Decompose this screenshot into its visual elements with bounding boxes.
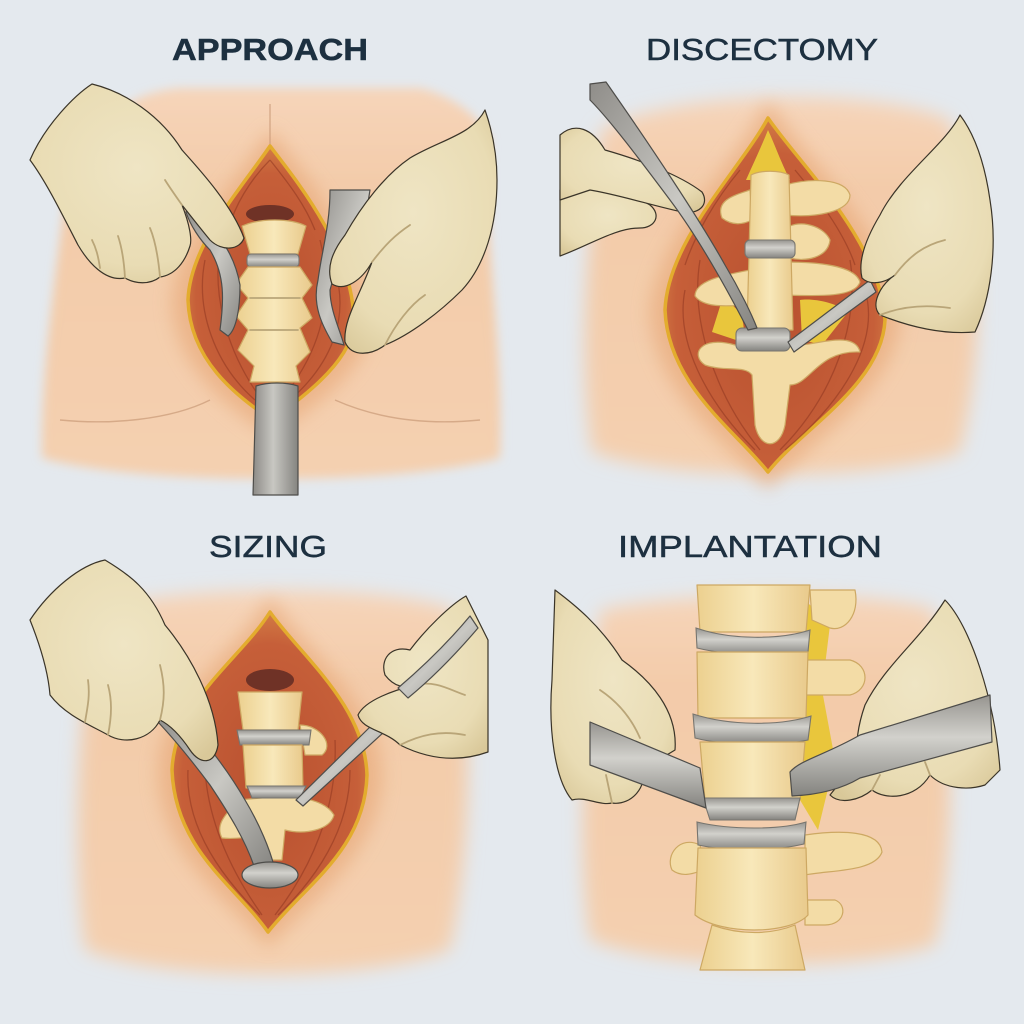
heading: implantation: IMPLANTATION <box>618 529 882 564</box>
hand: left glove <box>30 84 244 283</box>
panel: sizing <box>30 529 488 974</box>
retractor: bottom <box>253 383 298 495</box>
skin: implantation <box>583 595 950 965</box>
instrument: left inserter <box>590 722 706 808</box>
retractor: right <box>316 190 370 345</box>
hand: right glove <box>330 110 497 353</box>
instrument: right probe <box>788 280 876 352</box>
instrument: right sizer upper <box>398 616 478 698</box>
retractor: left <box>186 204 240 336</box>
skin: approach <box>42 88 500 479</box>
spine: sizing <box>220 692 334 860</box>
panel: discectomy <box>560 32 993 490</box>
heading: discectomy: DISCECTOMY <box>646 32 878 67</box>
instrument: right inserter <box>790 695 992 796</box>
spine: discectomy <box>695 171 860 444</box>
instrument: right sizer lower <box>296 722 384 806</box>
heading: sizing: SIZING <box>209 529 327 564</box>
instrument: left sizer <box>158 708 298 888</box>
incision: approach <box>60 104 480 436</box>
hand: left <box>551 590 675 804</box>
spine: approach <box>236 220 312 382</box>
spine: implantation <box>670 585 882 970</box>
hand: left <box>560 128 705 256</box>
hand: right <box>358 596 488 758</box>
skin: discectomy <box>585 97 978 474</box>
skin: sizing <box>78 590 468 974</box>
incision: discectomy <box>650 100 900 490</box>
instrument: left probe <box>590 82 757 330</box>
panel: approach <box>30 32 500 495</box>
hand: right fingers below instrument <box>830 600 1000 800</box>
panel: implantation <box>551 529 1000 970</box>
hand: right <box>861 115 993 333</box>
incision: sizing <box>158 596 382 948</box>
hand: left <box>30 560 218 761</box>
heading: approach: APPROACH <box>172 32 368 67</box>
